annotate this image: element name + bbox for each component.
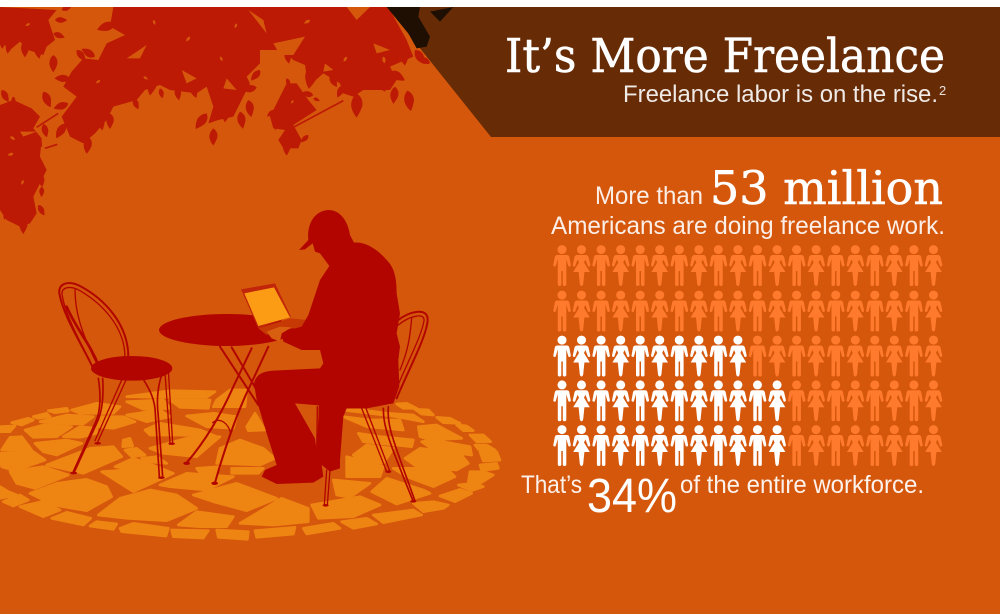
- subtitle: Freelance labor is on the rise.: [623, 81, 938, 108]
- right chair: [317, 312, 428, 505]
- subheading: Americans are doing freelance work.: [551, 212, 945, 240]
- pictogram row 2: [553, 291, 942, 332]
- laptop: [241, 283, 292, 342]
- patio stones: [0, 390, 500, 539]
- man silhouette: [254, 210, 400, 484]
- laptop keyboard base: [258, 318, 308, 335]
- stat caption: 34%: That’s: [521, 471, 582, 499]
- subtitle: 2: [939, 83, 946, 98]
- stat caption: 34%: [521, 470, 924, 523]
- table: [159, 314, 294, 485]
- title: It’s More Freelance: [505, 29, 945, 84]
- foliage gaps: [7, 7, 390, 185]
- pictogram row 3: [553, 336, 942, 376]
- banner: [387, 7, 1000, 137]
- stat caption: 34%: 34%: [587, 470, 677, 523]
- left chair: [59, 283, 173, 477]
- pictogram row 5: [553, 425, 942, 466]
- top white strip: [0, 0, 1000, 7]
- pictogram row 4: [553, 380, 942, 421]
- headline stat: 53 million: More than: [595, 182, 703, 210]
- stat caption: 34%: of the entire workforce.: [680, 471, 924, 499]
- illustration: patio scene: [0, 210, 500, 539]
- illustration: tree foliage: [0, 4, 431, 234]
- headline stat: 53 million: [595, 161, 943, 215]
- banner dark leaves: [387, 7, 453, 48]
- pictogram row 1: [553, 245, 942, 286]
- headline stat: 53 million: 53 million: [710, 161, 943, 215]
